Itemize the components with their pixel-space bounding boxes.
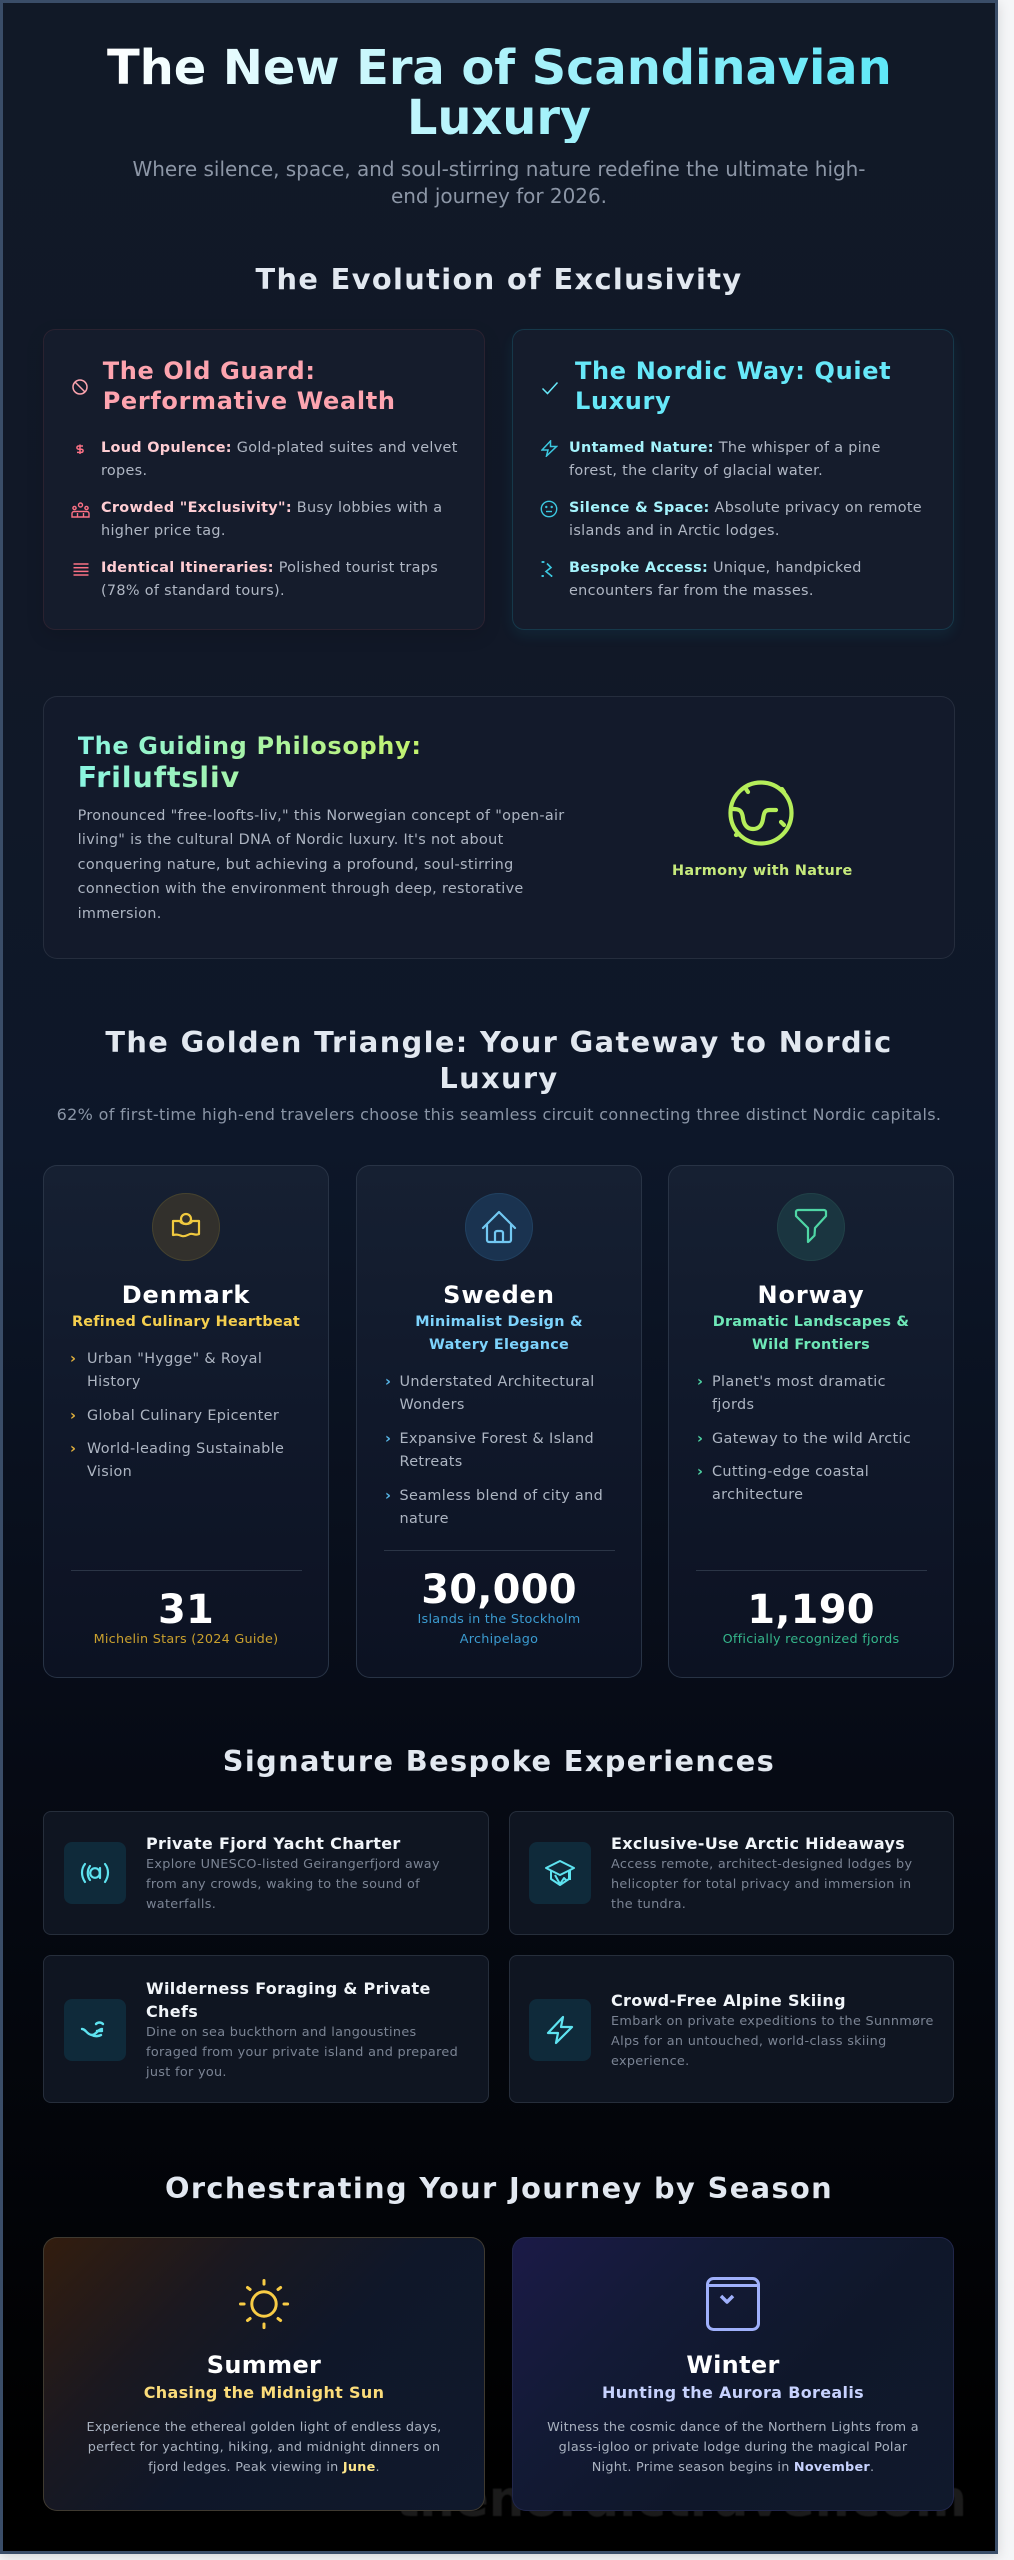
summer description: perfect for yachting, hiking, and midnight dinners on [88, 2440, 440, 2454]
norway list: fjords [712, 1396, 754, 1412]
heading: golden triangle: The Golden Triangle: Your Gateway to Nordic [105, 1024, 893, 1058]
item: crowded exclusivity: higher price tag. [101, 522, 226, 538]
title: Luxury [407, 90, 591, 146]
norway list: architecture [712, 1486, 803, 1502]
item: identical itineraries [101, 560, 438, 598]
arctic description: the tundra. [611, 1897, 686, 1912]
panel: foraging [43, 1955, 489, 2103]
icon: lightning [541, 440, 558, 457]
sweden list [385, 1374, 603, 1526]
yacht description: from any crowds, waking to the sound of [146, 1877, 420, 1892]
sweden list: › [385, 1430, 391, 1446]
foraging title [146, 1979, 431, 2021]
philosophy description: living" is the cultural DNA of Nordic luxury. It's not about [78, 832, 504, 848]
philosophy description: immersion. [78, 906, 162, 922]
panel: alpine skiing [509, 1955, 954, 2103]
summer subtitle: Chasing the Midnight Sun [144, 2382, 384, 2402]
norway list: Gateway to the wild Arctic [712, 1430, 911, 1446]
item: silence and space [569, 500, 922, 538]
icon: calendar window [706, 2277, 760, 2331]
stat label: Archipelago [460, 1632, 538, 1647]
yacht description [146, 1857, 440, 1912]
item: bespoke access: Bespoke Access: Unique, handpicked [569, 560, 862, 576]
sweden list: nature [400, 1510, 449, 1526]
item: untamed nature [569, 440, 881, 478]
icon: neutral face [540, 500, 558, 518]
sweden list: Expansive Forest & Island [400, 1430, 594, 1446]
arctic description: Access remote, architect-designed lodges by [611, 1857, 912, 1872]
denmark list: › [70, 1440, 76, 1456]
denmark list: History [87, 1374, 141, 1390]
sweden subtitle: Minimalist Design & [415, 1314, 583, 1330]
heading: nordic way: Luxury [575, 387, 671, 415]
sweden list: Wonders [400, 1396, 465, 1412]
arctic title: Exclusive-Use Arctic Hideaways [611, 1834, 905, 1853]
yacht description: waterfalls. [146, 1897, 216, 1912]
icon: check [542, 382, 558, 395]
panel: arctic hideaways [509, 1811, 954, 1935]
yacht title: Private Fjord Yacht Charter [146, 1834, 401, 1853]
sweden title: Sweden [443, 1281, 555, 1309]
skiing description: Alps for an untouched, world-class skiing [611, 2034, 887, 2049]
foraging description: Dine on sea buckthorn and langoustines [146, 2025, 417, 2040]
philosophy description: connection with the environment through deep, restorative [78, 881, 524, 897]
norway list: Cutting-edge coastal [712, 1464, 869, 1480]
stat: fjords: 1,190 [747, 1587, 875, 1633]
norway list: › [697, 1464, 703, 1480]
skiing description [611, 2014, 934, 2069]
norway list [697, 1374, 911, 1502]
item: untamed nature: forest, the clarity of glacial water. [569, 462, 823, 478]
winter description: Night. Prime season begins in November. [592, 2460, 874, 2474]
sweden list: Understated Architectural [400, 1374, 595, 1390]
item: bespoke access: encounters far from the masses. [569, 582, 814, 598]
foraging title: Chefs [146, 2002, 198, 2021]
summer title: Summer [207, 2351, 321, 2379]
sweden list: › [385, 1374, 391, 1390]
skiing title: Crowd-Free Alpine Skiing [611, 1991, 846, 2010]
subtitle: end journey for 2026. [391, 184, 607, 208]
norway list: Planet's most dramatic [712, 1374, 886, 1390]
icon: ban [72, 379, 88, 395]
philosophy description: Pronounced "free-loofts-liv," this Norwegian concept of "open-air [78, 808, 565, 824]
heading: nordic way: The Nordic Way: Quiet [575, 357, 891, 385]
norway subtitle [713, 1314, 909, 1352]
winter subtitle: Hunting the Aurora Borealis [602, 2382, 864, 2402]
winter description [547, 2420, 919, 2474]
stat label: Michelin Stars (2024 Guide) [94, 1632, 278, 1647]
summer description: fjord ledges. Peak viewing in June. [148, 2460, 380, 2474]
denmark subtitle: Refined Culinary Heartbeat [72, 1314, 300, 1330]
panel: yacht charter [43, 1811, 489, 1935]
foraging description: foraged from your private island and prepared [146, 2045, 458, 2060]
heading: old guard: The Old Guard: [103, 357, 316, 385]
panel: winter [512, 2237, 954, 2511]
item: crowded exclusivity [101, 500, 442, 538]
icon: people [71, 502, 90, 518]
norway list: › [697, 1430, 703, 1446]
icon: denmark [152, 1193, 220, 1261]
panel: summer [43, 2237, 485, 2511]
item: crowded exclusivity: Crowded "Exclusivity": Busy lobbies with a [101, 500, 442, 516]
denmark list: › [70, 1408, 76, 1424]
heading: old guard [102, 357, 396, 415]
heading: nordic way [575, 357, 891, 415]
subtitle [132, 157, 865, 208]
norway subtitle: Wild Frontiers [752, 1336, 870, 1352]
arctic description: helicopter for total privacy and immersion in [611, 1877, 911, 1892]
winter title: Winter [686, 2351, 780, 2379]
summer description: Experience the ethereal golden light of endless days, [86, 2420, 442, 2434]
item: bespoke access [569, 560, 862, 598]
icon: sweden [465, 1193, 533, 1261]
denmark list: › [70, 1350, 76, 1366]
foraging title: Wilderness Foraging & Private [146, 1979, 431, 1998]
item: untamed nature: Untamed Nature: The whisper of a pine [569, 440, 881, 456]
golden triangle subtitle: 62% of first-time high-end travelers choose this seamless circuit connecting three distinct Nordic capitals. [57, 1105, 941, 1124]
icon: dollar [76, 444, 84, 454]
sweden list: Retreats [400, 1454, 463, 1470]
arctic description [611, 1857, 912, 1912]
item: identical itineraries: Identical Itineraries: Polished tourist traps [101, 560, 438, 576]
icon: lightning [529, 1999, 591, 2061]
stat: michelin stars: 31 [158, 1587, 214, 1633]
icon: sun [239, 2279, 290, 2330]
philosophy description [78, 808, 565, 922]
item: loud opulence [101, 440, 458, 478]
heading: golden triangle [105, 1024, 893, 1094]
icon: norway [777, 1193, 845, 1261]
title: The New Era of Scandinavian [107, 40, 892, 96]
stat label: Islands in the Stockholm [418, 1612, 580, 1627]
foraging description [146, 2025, 458, 2080]
icon: route [542, 561, 552, 577]
yacht description: Explore UNESCO-listed Geirangerfjord away [146, 1857, 440, 1872]
panel: norway [668, 1165, 954, 1678]
norway title: Norway [757, 1281, 865, 1309]
panel: nordic way [512, 329, 954, 630]
sweden subtitle: Watery Elegance [429, 1336, 569, 1352]
icon: harmony with nature [728, 780, 794, 846]
subtitle: Where silence, space, and soul-stirring nature redefine the ultimate high- [132, 157, 865, 181]
panel: denmark [43, 1165, 329, 1678]
panel: guiding philosophy [43, 696, 955, 959]
item: identical itineraries: (78% of standard tours). [101, 582, 285, 598]
denmark list: Vision [87, 1464, 132, 1480]
foraging description: just for you. [146, 2065, 227, 2080]
heading: seasons: Orchestrating Your Journey by Season [165, 2171, 833, 2205]
icon: bird wave [64, 1999, 126, 2061]
sweden list: › [385, 1488, 391, 1504]
heading: friluftsliv [78, 731, 428, 799]
icon: yacht signal [64, 1842, 126, 1904]
stat: islands: 30,000 [421, 1567, 577, 1613]
item: loud opulence: ropes. [101, 462, 147, 478]
item: loud opulence: Loud Opulence: Gold-plated suites and velvet [101, 440, 458, 456]
denmark list: Urban "Hygge" & Royal [87, 1350, 262, 1366]
heading: evolution: The Evolution of Exclusivity [255, 262, 743, 296]
denmark list: World-leading Sustainable [87, 1440, 284, 1456]
watermark: thenordictravel.com [395, 2470, 967, 2528]
panel: sweden [356, 1165, 642, 1678]
denmark title: Denmark [122, 1281, 250, 1309]
winter description: Witness the cosmic dance of the Northern Lights from a [547, 2420, 919, 2434]
item: silence and space: Silence & Space: Absolute privacy on remote [569, 500, 922, 516]
title [107, 43, 891, 143]
stat label: Officially recognized fjords [723, 1632, 899, 1647]
summer description [86, 2420, 442, 2474]
heading: old guard: Performative Wealth [103, 387, 396, 415]
heading: golden triangle: Luxury [439, 1060, 559, 1094]
sweden subtitle [415, 1314, 583, 1352]
icon: lines [74, 563, 88, 576]
norway subtitle: Dramatic Landscapes & [713, 1314, 909, 1330]
denmark list: Global Culinary Epicenter [87, 1408, 279, 1424]
label: harmony with nature: Harmony with Nature [672, 863, 853, 879]
skiing description: Embark on private expeditions to the Sunnmøre [611, 2014, 934, 2029]
item: silence and space: islands and in Arctic lodges. [569, 522, 780, 538]
winter description: glass-igloo or private lodge during the magical Polar [559, 2440, 907, 2454]
sweden list: Seamless blend of city and [400, 1488, 603, 1504]
heading: signature experiences: Signature Bespoke Experiences [223, 1744, 775, 1778]
skiing description: experience. [611, 2054, 690, 2069]
panel: old guard [43, 329, 485, 630]
icon: graduation cap [529, 1842, 591, 1904]
denmark list [70, 1350, 284, 1480]
norway list: › [697, 1374, 703, 1390]
philosophy description: conquering nature, but achieving a profound, soul-stirring [78, 857, 514, 873]
stat label [418, 1612, 580, 1647]
